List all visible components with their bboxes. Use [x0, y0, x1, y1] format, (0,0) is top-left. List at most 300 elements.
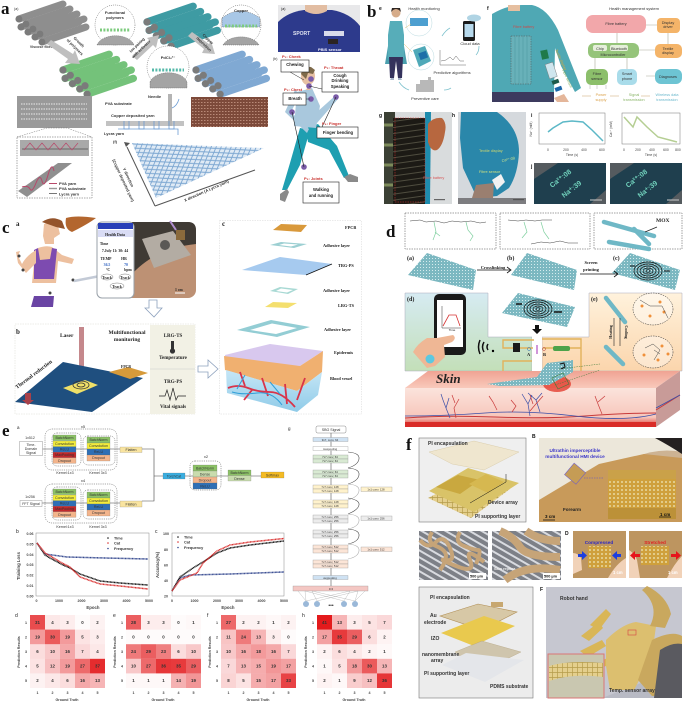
- sub-panel a: CNN architecture diagram: Domain: [25, 447, 37, 451]
- confusion matrix f: 5: [288, 691, 290, 695]
- diagram g: residual network: 7x7 conv, 512: [321, 560, 339, 564]
- confusion matrix e: 24: [131, 649, 136, 654]
- sub-panel a: CNN architecture diagram: Convolution: [89, 444, 108, 448]
- confusion matrix e: 1: [162, 678, 165, 683]
- photo: T-shirt with PBIS sensor: SPORT: [293, 31, 310, 37]
- chart c: accuracy: 60: [164, 564, 168, 568]
- confusion matrix f: 33: [286, 678, 291, 683]
- sub-panel a: runner and phone photo: a: [16, 220, 20, 228]
- confusion matrix e: 1: [121, 621, 123, 625]
- sub-panel (d): phone readout: (d): [407, 296, 414, 303]
- sub-panel c: exploded patch layers: FPCB: [345, 225, 356, 230]
- chart i: Na+ and Ca2+ concentrations: 400: [581, 148, 587, 152]
- sub-panel a: CNN architecture diagram: BatchNorm: [90, 493, 107, 497]
- confusion matrix e: 1: [192, 620, 195, 625]
- sub-panel a: CNN architecture diagram: Kernel:1x3: [56, 525, 74, 529]
- robot hand photo: [540, 586, 682, 698]
- health management system flowchart: Fibre: [593, 72, 601, 76]
- smart jacket illustration: Fibre battery: [513, 25, 534, 29]
- chart c: accuracy: 4000: [258, 599, 266, 603]
- confusion matrix d: Ground Truth: [56, 698, 78, 702]
- hydrogel films and process arrows: printing: [583, 267, 600, 272]
- health management system flowchart: Smart: [622, 72, 633, 76]
- confusion matrix h: 2: [323, 678, 326, 683]
- running human figure with sensor locations: (b): [273, 57, 277, 61]
- chart i: Na+ and Ca2+ concentrations: 200: [563, 148, 569, 152]
- central film and down arrow: [502, 293, 575, 334]
- chart c: accuracy: 2000: [213, 599, 221, 603]
- confusion matrix d: 2: [96, 620, 99, 625]
- diagram g: residual network: 7x7 conv, 512: [321, 564, 339, 568]
- confusion matrix f: 15: [256, 664, 261, 669]
- photos j: textile display readouts: j: [530, 164, 533, 170]
- health management system flowchart: Bluetooth: [611, 47, 627, 51]
- forearm photo with inset: 1 cm: [660, 512, 670, 517]
- layer stack exploded view: IZO: [431, 636, 439, 642]
- confusion matrix h: Prediction Results: [304, 636, 308, 668]
- sub-panel a: CNN architecture diagram: 1x512: [25, 436, 35, 440]
- chart b: training loss: Epoch: [86, 605, 100, 610]
- confusion matrix d: 19: [65, 634, 70, 640]
- SEM images on skin replica: Skin replica: [494, 567, 516, 571]
- confusion matrix h: 1: [383, 649, 386, 654]
- confusion matrix h: 3: [354, 691, 356, 695]
- diagram g: residual network: 7x7 conv, 128: [321, 489, 339, 493]
- photo g: fibre battery under jacket: Fibre battery: [423, 176, 444, 180]
- diagram g: residual network: 7x7 conv, 128: [321, 504, 339, 508]
- diagram g: residual network: 7x7 conv, 512: [321, 545, 339, 549]
- confusion matrix f: 17: [271, 678, 276, 683]
- smart jacket illustration: Textile display: [554, 49, 567, 71]
- confusion matrix e: 27: [146, 664, 151, 669]
- diagram g: residual network: 7x7 conv, 64: [322, 455, 338, 459]
- running human figure with sensor locations: Speaking: [331, 84, 350, 89]
- photos j: textile display readouts: Na⁺:39: [561, 180, 583, 200]
- process labels: with activator: [130, 39, 152, 60]
- sub-panel a: CNN architecture diagram: ReLU: [94, 505, 103, 509]
- health management system flowchart: driver: [663, 25, 673, 29]
- confusion matrix f: 0: [287, 634, 290, 640]
- confusion matrix f: 24: [241, 634, 246, 640]
- SEM images on skin replica: 500 µm: [544, 574, 558, 578]
- confusion matrix e: 14: [176, 678, 181, 683]
- sub-panel a: CNN architecture diagram: MaxPooling: [55, 507, 74, 511]
- confusion matrix d: 4: [51, 678, 54, 683]
- confusion matrix h: 2: [338, 691, 340, 695]
- chart b: training loss: Training Loss: [16, 551, 21, 580]
- confusion matrix h: 5: [368, 620, 371, 625]
- health management system flowchart: Microcontroller: [601, 53, 626, 57]
- photo h: textile display on sleeve: Textile display: [479, 149, 503, 153]
- sub-panel a: CNN architecture diagram: x4: [81, 478, 86, 483]
- device exploded view: PI supporting layer: [475, 514, 520, 520]
- confusion matrix f: 13: [256, 634, 261, 640]
- sub-panel a: runner and phone photo: Time: [100, 242, 108, 246]
- sub-panel (d): phone readout: [405, 293, 532, 371]
- sub-panel a: CNN architecture diagram: Kernel 3x3: [89, 525, 107, 529]
- confusion matrix f: 18: [256, 649, 261, 654]
- running human figure with sensor locations: P₃: Chest: [284, 87, 303, 92]
- photo h: textile display on sleeve: Fibre sensor: [479, 170, 501, 174]
- process labels: [66, 8, 248, 60]
- confusion matrix d: 27: [80, 664, 85, 669]
- confusion matrix h: Ground Truth: [343, 698, 365, 702]
- confusion matrix d: 3: [66, 691, 68, 695]
- sub-panel a: runner and phone photo: 7.July 11: 30: 44: [102, 249, 128, 253]
- layer stack exploded view: PDMS substrate: [490, 684, 529, 690]
- sub-panel a: CNN architecture diagram: Time-: [26, 443, 36, 447]
- health management system flowchart: Textile: [663, 47, 673, 51]
- health management system flowchart: display: [662, 51, 674, 55]
- confusion matrix h: 3: [353, 620, 356, 625]
- hydrogel films and process arrows: (c): [613, 255, 620, 262]
- confusion matrix h: [302, 613, 392, 702]
- panel: b fibre battery smart garment: [367, 2, 682, 204]
- diagram g: residual network: •••: [329, 586, 334, 591]
- layer stack exploded view: PI supporting layer: [424, 671, 469, 677]
- confusion matrix e: 29: [191, 664, 196, 669]
- diagram g: residual network: 7x7 conv, 64: [322, 459, 338, 463]
- compressed and stretched photos: [565, 531, 682, 578]
- fibre process bundles: Viscose fibers: [30, 45, 54, 49]
- compressed and stretched photos: 1 cm: [668, 570, 678, 575]
- sub-panel a: runner and phone photo: Track: [120, 276, 131, 280]
- sub-panel (d): phone readout: Time: [449, 328, 456, 332]
- confusion matrix e: 19: [191, 678, 196, 683]
- sub-panel c: exploded patch layers: [220, 220, 362, 414]
- confusion matrix h: 4: [312, 665, 314, 669]
- running human figure with sensor locations: and running: [309, 193, 334, 198]
- sub-panel c: exploded patch layers: Adhesive layer: [324, 327, 351, 332]
- confusion matrix f: 2: [287, 620, 290, 625]
- diagram g: residual network: 7x7 conv, 256: [321, 530, 339, 534]
- confusion matrix d: 5: [96, 691, 98, 695]
- diagram g: residual network: SBG Signal: [322, 428, 340, 432]
- diagram g: residual network: 1x1 conv, 512: [367, 548, 385, 552]
- chart i: Na+ and Ca2+ concentrations: Time (s): [566, 153, 578, 157]
- smart jacket illustration: Fibre sensor: [561, 69, 573, 89]
- health management system flowchart: sensor: [591, 77, 603, 81]
- blue textile grid with axes: Y direction: [122, 167, 135, 188]
- confusion matrix f: 16: [271, 649, 276, 654]
- confusion matrix f: 1: [272, 620, 275, 625]
- sub-panel b: laser writing and monitoring: [15, 324, 195, 414]
- running human figure with sensor locations: P₅: Joints: [304, 176, 324, 181]
- confusion matrix f: 8: [227, 678, 230, 683]
- confusion matrix h: h: [302, 613, 305, 619]
- blue textile grid with axes: (Copper deposited yarn): [111, 158, 136, 203]
- running human figure with sensor locations: Chewing: [286, 62, 304, 67]
- confusion matrix e: 0: [162, 634, 165, 640]
- confusion matrix h: 1: [323, 664, 326, 669]
- confusion matrix f: 17: [286, 664, 291, 669]
- skin block with vessels: [405, 360, 680, 427]
- confusion matrix d: 4: [25, 665, 27, 669]
- confusion matrix h: 7: [383, 620, 386, 625]
- confusion matrix h: 30: [367, 664, 372, 669]
- forearm photo with inset: multifunctional HMI device: [545, 454, 605, 459]
- confusion matrix f: 3: [216, 650, 218, 654]
- blue textile grid with axes: [111, 139, 264, 206]
- confusion matrix d: 19: [65, 664, 70, 669]
- sub-panel a: CNN architecture diagram: ReLU: [200, 484, 210, 488]
- confusion matrix h: 9: [353, 678, 356, 683]
- confusion matrix d: 0: [81, 620, 84, 625]
- diagram g: residual network: 1x1 conv, 256: [367, 516, 385, 520]
- sub-panel a: CNN architecture diagram: [17, 424, 284, 529]
- chart c: accuracy: Time: [184, 536, 193, 540]
- confusion matrix f: 2: [242, 620, 245, 625]
- chart i: Na+ and Ca2+ concentrations: Time (s): [645, 153, 657, 157]
- sub-panel a: CNN architecture diagram: Convolution: [55, 496, 74, 500]
- panel: d hydrogel sensor on skin: [386, 213, 682, 427]
- photo h: textile display on sleeve: [452, 112, 526, 204]
- chart b: training loss: 0.03: [26, 563, 34, 567]
- sub-panel (e): heating and cooling rods: Heating: [608, 325, 613, 339]
- confusion matrix f: 13: [241, 664, 246, 669]
- running human figure with sensor locations: [273, 54, 358, 203]
- confusion matrix e: 35: [176, 664, 181, 669]
- sub-panel a: CNN architecture diagram: Flatten: [126, 502, 136, 506]
- running human figure with sensor locations: Walking: [313, 187, 329, 192]
- hydrogel films and process arrows: [407, 253, 680, 290]
- confusion matrix d: 7: [81, 649, 84, 654]
- sub-panel a: CNN architecture diagram: ReLU: [60, 502, 69, 506]
- sub-panel a: CNN architecture diagram: Softmax: [266, 474, 279, 478]
- blue textile grid with axes: X direction (A Lycra yarn): [183, 178, 230, 203]
- health monitoring loop: Predictive algorithms: [433, 70, 471, 75]
- panel: a fibre fabrication and textile sensor: [1, 0, 360, 206]
- chart b: training loss: b: [16, 529, 19, 535]
- sub-panel a: CNN architecture diagram: Flatten: [126, 448, 136, 452]
- sub-panel a: CNN architecture diagram: Kernel:1x3: [56, 471, 74, 475]
- chart c: accuracy: [155, 529, 288, 610]
- confusion matrix f: 7: [287, 649, 290, 654]
- substrate photo and magnified stitch: [17, 96, 92, 198]
- confusion matrix e: 1: [132, 678, 135, 683]
- substrate photo and magnified stitch: Lycra yarn: [59, 192, 80, 196]
- confusion matrix d: 1: [36, 691, 38, 695]
- layer stack exploded view: electrode: [424, 620, 446, 626]
- heading: d: d: [386, 222, 396, 241]
- confusion matrix e: Ground Truth: [152, 698, 174, 702]
- chart i: Na+ and Ca2+ concentrations: 600: [599, 148, 605, 152]
- circuit: B: [543, 352, 546, 357]
- circuit: [503, 337, 581, 388]
- process labels: deposition: [195, 36, 212, 53]
- knitted copper textile photo: [191, 97, 268, 127]
- photos j: textile display readouts: Ca²⁺:08: [625, 169, 649, 190]
- confusion matrix h: 2: [323, 649, 326, 654]
- confusion matrix d: 4: [51, 620, 54, 625]
- confusion matrix e: [113, 613, 201, 702]
- confusion matrix f: 5: [216, 679, 218, 683]
- confusion matrix d: 13: [95, 678, 100, 683]
- sub-panel b: laser writing and monitoring: Thermal reduction: [15, 359, 54, 391]
- confusion matrix h: 1: [324, 691, 326, 695]
- confusion matrix d: 2: [52, 691, 54, 695]
- photo g: fibre battery under jacket: [379, 112, 452, 204]
- chart b: training loss: 2000: [78, 599, 86, 603]
- sub-panel c: exploded patch layers: Epidermis: [334, 350, 353, 355]
- health management system flowchart: Chip: [596, 47, 604, 51]
- chart b: training loss: 0: [36, 599, 38, 603]
- layer stack exploded view: [419, 587, 533, 698]
- sub-panel b: laser writing and monitoring: TRG-PS: [164, 380, 182, 385]
- health management system flowchart: phone: [622, 77, 632, 81]
- heading: f: f: [406, 435, 412, 454]
- sub-panel a: CNN architecture diagram: Dense: [234, 477, 245, 481]
- confusion matrix f: 27: [226, 620, 231, 625]
- chart b: training loss: Cat: [114, 542, 121, 546]
- photo h: textile display on sleeve: Ca²⁺:08: [501, 156, 515, 163]
- sub-panel a: CNN architecture diagram: Dropout: [92, 511, 105, 515]
- chart c: accuracy: 20: [164, 594, 168, 598]
- sub-panel a: CNN architecture diagram: Dense: [200, 472, 210, 476]
- sub-panel a: runner and phone photo: 36.5: [104, 263, 110, 267]
- process labels: polymers: [106, 15, 125, 20]
- sub-panel b: laser writing and monitoring: Laser: [60, 333, 74, 339]
- confusion matrix e: 6: [177, 649, 180, 654]
- sub-panel b: laser writing and monitoring: Multifunctional: [109, 330, 146, 336]
- sub-panel a: CNN architecture diagram: Convolution: [89, 499, 108, 503]
- confusion matrix f: 5: [242, 678, 245, 683]
- sub-panel (e): heating and cooling rods: [542, 293, 682, 371]
- chart b: training loss: [16, 529, 153, 610]
- confusion matrix d: 16: [80, 678, 85, 683]
- confusion matrix e: 0: [177, 620, 180, 625]
- compressed and stretched photos: 1 cm: [613, 570, 623, 575]
- layer stack exploded view: array: [431, 658, 443, 664]
- sub-panel a: runner and phone photo: Health Data: [105, 233, 125, 237]
- confusion matrix h: 13: [382, 664, 387, 669]
- health management system flowchart: Wireless data: [655, 93, 679, 97]
- sub-panel a: CNN architecture diagram: MaxPooling: [55, 453, 74, 457]
- blue textile grid with axes: (f): [113, 139, 118, 144]
- confusion matrix e: 1: [147, 678, 150, 683]
- confusion matrix f: 19: [271, 664, 276, 669]
- process labels: PdCl₄²⁻: [161, 55, 175, 60]
- forearm photo with inset: B: [532, 434, 536, 440]
- process arrows: [47, 32, 215, 64]
- confusion matrix e: 0: [177, 634, 180, 640]
- process labels: Copper: [234, 8, 248, 13]
- confusion matrix f: 10: [226, 649, 231, 654]
- confusion matrix h: 41: [322, 620, 327, 625]
- sub-panel a: CNN architecture diagram: Dropout: [199, 478, 211, 482]
- sub-panel a: CNN architecture diagram: Dropout: [58, 459, 71, 463]
- substrate photo and magnified stitch: PVA yarn: [59, 181, 77, 186]
- heading: c: c: [2, 218, 10, 237]
- confusion matrix h: 5: [384, 691, 386, 695]
- chart b: training loss: 3000: [100, 599, 108, 603]
- sub-panel b: laser writing and monitoring: Temperature: [159, 356, 188, 361]
- health monitoring loop: [379, 6, 481, 101]
- sub-panel (e): heating and cooling rods: Cooling: [624, 325, 629, 339]
- chart b: training loss: 0.01: [26, 584, 34, 588]
- confusion matrix h: 5: [338, 664, 341, 669]
- sub-panel a: CNN architecture diagram: ReLU: [94, 450, 103, 454]
- circuit: A: [527, 352, 531, 357]
- confusion matrix e: 29: [146, 649, 151, 654]
- health management system flowchart: Power: [596, 93, 607, 97]
- photos j: textile display readouts: [530, 163, 682, 204]
- sub-panel a: CNN architecture diagram: Signal: [26, 451, 36, 455]
- substrate photo and magnified stitch: PVA substrate: [59, 186, 87, 191]
- health management system flowchart: Fibre battery: [605, 22, 627, 26]
- device exploded view: [419, 438, 526, 522]
- confusion matrix d: 5: [25, 679, 27, 683]
- needle diagram: Needle: [148, 94, 162, 99]
- confusion matrix h: 1: [312, 621, 314, 625]
- confusion matrix e: 0: [192, 634, 195, 640]
- arrow down: [145, 300, 162, 317]
- sub-panel a: runner and phone photo: 70: [124, 263, 128, 267]
- confusion matrix e: 3: [121, 650, 123, 654]
- sub-panel a: runner and phone photo: [16, 216, 196, 307]
- confusion matrix h: 13: [337, 620, 342, 625]
- confusion matrix e: 10: [131, 664, 136, 669]
- diagram g: residual network: 7x7 conv, 512: [321, 549, 339, 553]
- confusion matrix h: 35: [337, 634, 342, 640]
- robot hand photo: F: [540, 587, 543, 593]
- hydrogel films and process arrows: (b): [507, 255, 514, 262]
- confusion matrix e: 0: [132, 634, 135, 640]
- confusion matrix h: 18: [352, 664, 357, 669]
- health management system flowchart: Diagnoses: [659, 75, 677, 79]
- confusion matrix f: 2: [257, 620, 260, 625]
- confusion matrix h: 6: [338, 649, 341, 654]
- chart c: accuracy: 0: [171, 599, 173, 603]
- confusion matrix d: 30: [50, 634, 55, 640]
- sub-panel a: CNN architecture diagram: 1x256: [25, 495, 35, 499]
- confusion matrix d: 19: [35, 634, 40, 640]
- SEM images on skin replica: 500 µm: [470, 574, 484, 578]
- hydrogel films and process arrows: Crosslinking: [481, 265, 506, 270]
- confusion matrix f: Ground Truth: [247, 698, 269, 702]
- confusion matrix h: 3: [312, 650, 314, 654]
- sub-panel a: runner and phone photo: °C: [106, 268, 110, 272]
- chart i: Na+ and Ca2+ concentrations: Na⁺ (mM): [529, 122, 533, 136]
- confusion matrix h: 1: [338, 678, 341, 683]
- chart c: accuracy: 100: [163, 532, 169, 536]
- sub-panel a: runner and phone photo: TEMP: [101, 257, 112, 261]
- diagram g: residual network: maxpooling: [323, 447, 338, 451]
- process labels: of polymers: [66, 38, 84, 56]
- health management system flowchart: [582, 6, 682, 102]
- confusion matrix f: 3: [258, 691, 260, 695]
- confusion matrix d: 16: [65, 649, 70, 654]
- confusion matrix e: 2: [121, 636, 123, 640]
- running human figure with sensor locations: Cough: [333, 73, 347, 78]
- chart c: accuracy: 5000: [280, 599, 288, 603]
- photo: T-shirt with PBIS sensor: [278, 5, 360, 52]
- running human figure with sensor locations: P₂: Throat: [324, 65, 344, 70]
- confusion matrix f: 2: [216, 636, 218, 640]
- chart b: training loss: 0.00: [26, 594, 34, 598]
- confusion matrix f: 2: [242, 691, 244, 695]
- hydrogel films and process arrows: Screen: [585, 260, 598, 265]
- diagram g: residual network: avgpooling: [323, 576, 337, 580]
- sub-panel a: CNN architecture diagram: ReLU: [60, 448, 69, 452]
- sub-panel a: CNN architecture diagram: TorchCat: [167, 474, 181, 478]
- health monitoring loop: Cloud data: [460, 41, 480, 46]
- process labels: Copper: [202, 33, 214, 46]
- panel: c laser graphene skin patch: [2, 216, 362, 414]
- confusion matrix f: 4: [272, 691, 274, 695]
- confusion matrix f: 1: [216, 621, 218, 625]
- confusion matrix e: 3: [162, 620, 165, 625]
